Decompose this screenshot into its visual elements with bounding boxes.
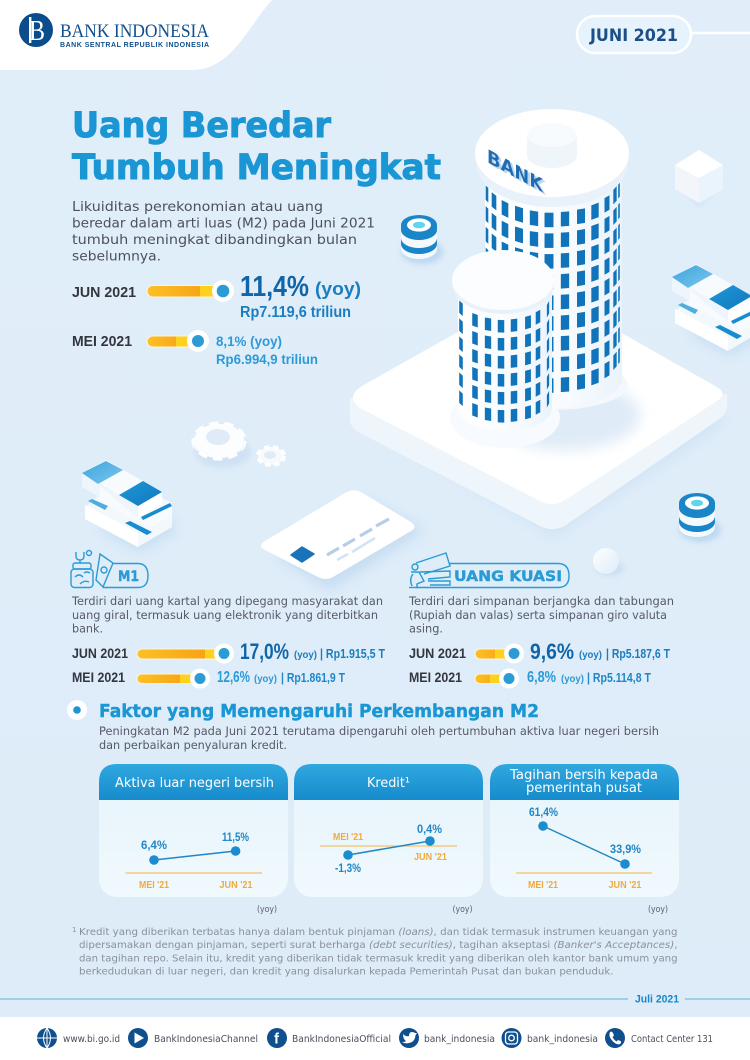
M1 description: uang giral, termasuk uang elektronik yang diterbitkan bbox=[72, 608, 378, 622]
chart card: Tagihan bersih kepada pemerintah pusat: 61,4% bbox=[529, 805, 558, 819]
website: www.bi.go.id bbox=[63, 1034, 120, 1045]
intro text: beredar dalam arti luas (M2) pada Juni 2021 bbox=[72, 216, 375, 232]
M1 June row: (yoy) bbox=[294, 650, 317, 661]
date badge bbox=[577, 16, 750, 53]
footer contact bar bbox=[0, 1017, 750, 1060]
logo wordmark: BANK INDONESIA bbox=[60, 21, 209, 42]
title: Uang Beredar bbox=[72, 106, 332, 146]
M1 May row bbox=[72, 668, 345, 688]
footnote: berkedudukan di luar negeri, dan kredit yang disalurkan kepada Pemerintah Pusat dan bukan penduduk. bbox=[79, 966, 614, 978]
Uang Kuasi May row bbox=[409, 668, 651, 688]
intro text: sebelumnya. bbox=[72, 248, 161, 264]
publication date line: Juli 2021 bbox=[635, 994, 679, 1006]
logo emblem bbox=[19, 13, 53, 47]
Uang Kuasi June row: | Rp5.187,6 T bbox=[606, 646, 670, 661]
title: Tumbuh Meningkat bbox=[72, 148, 441, 188]
unit labels bbox=[257, 905, 668, 915]
icon: coin stack upper bbox=[401, 215, 443, 264]
M1 May row: | Rp1.861,9 T bbox=[281, 670, 345, 685]
section description bbox=[99, 724, 659, 752]
intro text: Likuiditas perekonomian atau uang bbox=[72, 199, 323, 215]
icon: coin stack lower bbox=[679, 493, 721, 542]
footnote: dan tagihan repo. Selain itu, kredit yang diberikan tidak termasuk kredit yang diberikan oleh kantor bank umum yang bbox=[79, 954, 678, 964]
Uang Kuasi description: (Rupiah dan valas) serta simpanan giro valuta bbox=[409, 608, 667, 622]
Facebook: f bbox=[274, 1030, 280, 1048]
M1 June row: | Rp1.915,5 T bbox=[320, 646, 385, 661]
icon: money stack right bbox=[672, 264, 750, 356]
chart card: Kredit: JUN '21 bbox=[414, 852, 447, 863]
header logo panel bbox=[0, 0, 272, 70]
icon: white cube bbox=[675, 150, 724, 207]
upper roof bbox=[475, 109, 629, 207]
M1 May row: 12,6% bbox=[217, 669, 250, 686]
chart card: Kredit: Kredit¹ bbox=[367, 776, 410, 791]
chart card: Tagihan bersih kepada pemerintah pusat: MEI '21 bbox=[528, 880, 558, 891]
roof cylinder bbox=[527, 123, 577, 168]
M1 June row: JUN 2021 bbox=[72, 646, 128, 661]
unit labels: (yoy) bbox=[257, 905, 277, 915]
Uang Kuasi May row: 6,8% bbox=[527, 669, 556, 686]
chart card: Tagihan bersih kepada pemerintah pusat: Tagihan bersih kepada bbox=[509, 768, 658, 783]
chart card: Kredit bbox=[294, 764, 483, 897]
Uang Kuasi June row bbox=[409, 639, 670, 664]
M1 label: M1 bbox=[118, 569, 139, 585]
website bbox=[37, 1028, 120, 1048]
chart card: Aktiva luar negeri bersih: JUN '21 bbox=[220, 880, 253, 891]
M1 description bbox=[71, 594, 383, 636]
platform bbox=[350, 290, 727, 529]
Uang Kuasi June row: JUN 2021 bbox=[409, 646, 466, 661]
Uang Kuasi June row: 9,6% bbox=[530, 639, 574, 664]
Uang Kuasi May row: MEI 2021 bbox=[409, 670, 462, 685]
Uang Kuasi label bbox=[416, 564, 569, 588]
Uang Kuasi June row: (yoy) bbox=[579, 650, 602, 661]
icon: money stack left bbox=[82, 460, 180, 552]
YouTube: BankIndonesiaChannel bbox=[154, 1034, 258, 1045]
intro text bbox=[72, 199, 375, 264]
date badge: JUNI 2021 bbox=[589, 26, 678, 45]
icon: M1 jar and banknote bbox=[71, 550, 113, 588]
Facebook bbox=[267, 1028, 391, 1048]
Instagram bbox=[502, 1028, 598, 1048]
M1 June row bbox=[72, 639, 385, 664]
chart card: Kredit: MEI '21 bbox=[333, 832, 363, 843]
panel: M1 bbox=[71, 550, 385, 688]
chart card: Aktiva luar negeri bersih bbox=[99, 764, 288, 897]
logo emblem: B bbox=[29, 16, 45, 47]
footnote: Kredit yang diberikan terbatas hanya dalam bentuk pinjaman (loans), dan tidak termasuk instrumen keuangan yang bbox=[79, 927, 678, 938]
chart card: Tagihan bersih kepada pemerintah pusat bbox=[490, 764, 679, 897]
YouTube bbox=[128, 1028, 258, 1048]
Uang Kuasi description bbox=[408, 594, 674, 636]
Contact center: Contact Center 131 bbox=[631, 1034, 713, 1045]
chart card: Tagihan bersih kepada pemerintah pusat: 33,9% bbox=[610, 842, 641, 856]
M2 row: May 2021 bbox=[72, 330, 318, 367]
chart card: Aktiva luar negeri bersih: 6,4% bbox=[141, 838, 167, 852]
M2 row: June 2021 bbox=[72, 271, 361, 321]
Twitter: bank_indonesia bbox=[424, 1034, 495, 1045]
chart card: Tagihan bersih kepada pemerintah pusat: pemerintah pusat bbox=[526, 781, 642, 796]
Uang Kuasi May row: | Rp5.114,8 T bbox=[587, 670, 651, 685]
M1 May row: (yoy) bbox=[254, 674, 277, 685]
Uang Kuasi label: UANG KUASI bbox=[454, 569, 562, 585]
illustration: bank building on platform bbox=[350, 109, 727, 536]
chart card: Aktiva luar negeri bersih: MEI '21 bbox=[139, 880, 169, 891]
unit labels: (yoy) bbox=[452, 905, 472, 915]
chart card: Aktiva luar negeri bersih: 11,5% bbox=[222, 830, 249, 844]
upper tower bbox=[478, 155, 628, 410]
M2 row: May 2021: Rp6.994,9 triliun bbox=[216, 351, 318, 367]
M2 row: June 2021: Rp7.119,6 triliun bbox=[240, 304, 351, 321]
M2 row: May 2021: MEI 2021 bbox=[72, 334, 132, 350]
icon: sphere bbox=[593, 548, 624, 576]
chart card: Kredit: 0,4% bbox=[417, 822, 442, 836]
Facebook: BankIndonesiaOfficial bbox=[292, 1034, 391, 1045]
chart card: Aktiva luar negeri bersih: Aktiva luar negeri bersih bbox=[115, 776, 274, 791]
chart card: Tagihan bersih kepada pemerintah pusat: JUN '21 bbox=[608, 880, 642, 891]
footnote: 1 bbox=[72, 926, 76, 934]
M1 description: Terdiri dari uang kartal yang dipegang masyarakat dan bbox=[71, 594, 383, 608]
M1 label bbox=[103, 564, 148, 588]
icon: hand holding cards bbox=[409, 553, 450, 588]
chart card: Kredit: -1,3% bbox=[335, 861, 361, 875]
M2 row: June 2021: JUN 2021 bbox=[72, 285, 136, 301]
footnote: dipersamakan dengan pinjaman, seperti surat berharga (debt securities), tagihan akseptasi (Banker's Acceptances) , bbox=[79, 940, 677, 951]
lower tower bbox=[450, 250, 560, 448]
section description: dan perbaikan penyaluran kredit. bbox=[99, 738, 287, 752]
icon: gears bbox=[194, 424, 284, 468]
Twitter bbox=[399, 1028, 495, 1048]
icon: bank card bbox=[261, 490, 425, 590]
M2 row: May 2021: 8,1% (yoy) bbox=[216, 333, 282, 349]
panel: Uang Kuasi bbox=[408, 553, 674, 688]
M1 May row: MEI 2021 bbox=[72, 670, 125, 685]
M2 row: June 2021: (yoy) bbox=[315, 279, 361, 299]
section description: Peningkatan M2 pada Juni 2021 terutama dipengaruhi oleh pertumbuhan aktiva luar negeri bersih bbox=[99, 724, 659, 738]
Uang Kuasi May row: (yoy) bbox=[561, 674, 584, 685]
title bbox=[72, 106, 441, 188]
Instagram: bank_indonesia bbox=[527, 1034, 598, 1045]
section heading: Faktor: Faktor yang Memengaruhi Perkembangan M2 bbox=[99, 701, 539, 722]
footnote bbox=[72, 926, 678, 978]
M1 June row: 17,0% bbox=[240, 639, 289, 664]
M2 row: June 2021: 11,4% bbox=[240, 271, 309, 303]
logo wordmark: BANK SENTRAL REPUBLIK INDONESIA bbox=[60, 42, 209, 49]
Contact center bbox=[605, 1028, 713, 1048]
unit labels: (yoy) bbox=[648, 905, 668, 915]
M1 description: bank. bbox=[72, 622, 103, 636]
Uang Kuasi description: Terdiri dari simpanan berjangka dan tabungan bbox=[408, 594, 674, 608]
Uang Kuasi description: asing. bbox=[409, 622, 443, 636]
intro text: tumbuh meningkat dibandingkan bulan bbox=[72, 232, 357, 248]
BANK sign: BANK bbox=[487, 144, 544, 198]
